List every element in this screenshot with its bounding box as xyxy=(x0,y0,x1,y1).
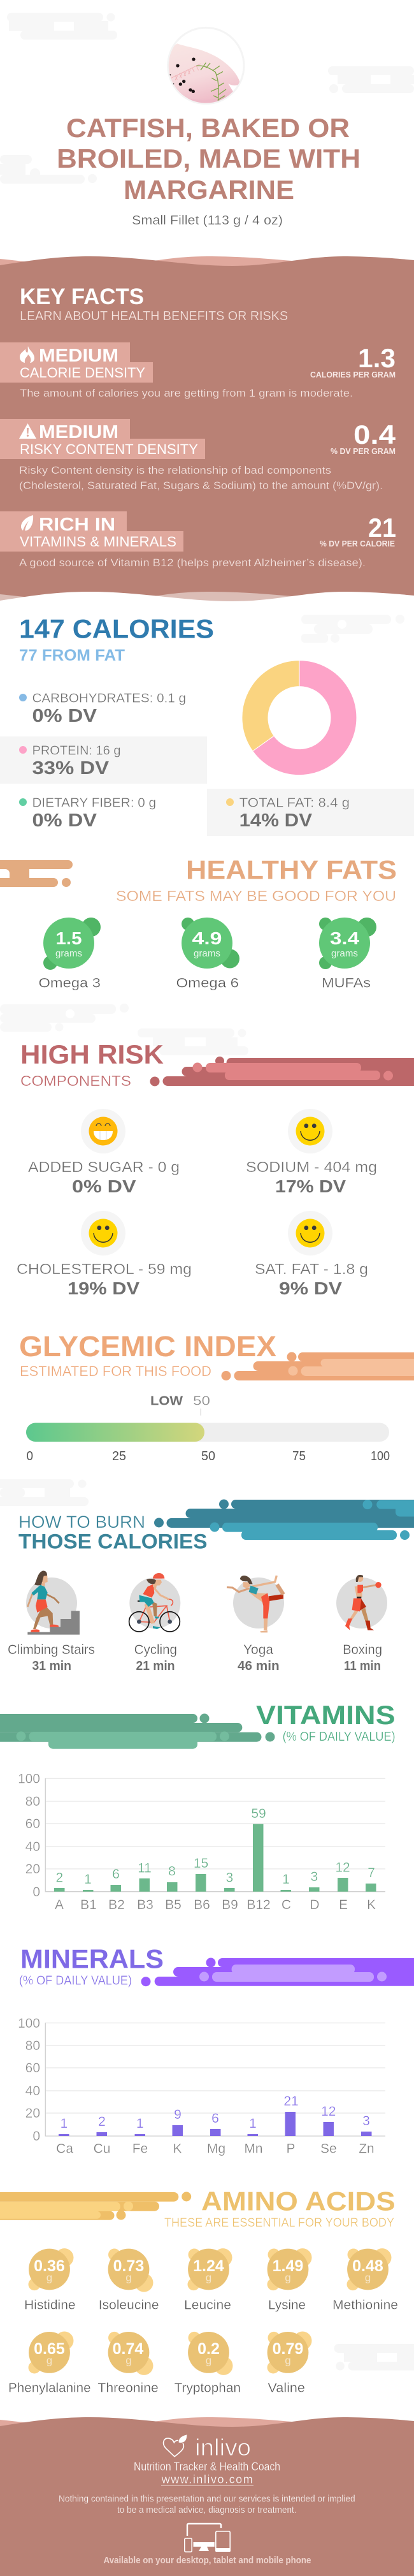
chart: macronutrient donut xyxy=(242,661,357,775)
activity: cycling: Cycling xyxy=(134,1643,177,1657)
item: added sugar: ADDED SUGAR - 0 g xyxy=(28,1159,180,1175)
heading: minerals: MINERALS xyxy=(20,1944,164,1974)
panel: key facts xyxy=(0,256,414,610)
chart: vitamins bar chart: B1 xyxy=(80,1898,97,1912)
gauge: glycemic index bar: 50 xyxy=(201,1449,215,1463)
amino: histidine: 0.36 xyxy=(34,2257,65,2275)
item: protein: PROTEIN: 16 g xyxy=(32,744,121,758)
item: protein: 33% DV xyxy=(32,758,110,779)
chart: minerals bar chart: 1 xyxy=(136,2116,144,2131)
icon: boxer xyxy=(336,1575,387,1630)
activity: climbing stairs: Climbing Stairs xyxy=(8,1643,95,1657)
chart: vitamins bar chart: A xyxy=(55,1898,64,1912)
chart: minerals bar chart: 12 xyxy=(321,2104,336,2119)
heading: glycemic index: GLYCEMIC INDEX xyxy=(19,1330,276,1363)
chart: minerals bar chart: 2 xyxy=(98,2114,106,2129)
chart: minerals bar chart: 100 xyxy=(18,2016,40,2031)
chart: vitamins bar chart: B5 xyxy=(165,1898,182,1912)
fat: omega 3: 1.5 xyxy=(56,928,82,948)
fat: omega 3: grams xyxy=(55,948,82,959)
activity: yoga: 46 min xyxy=(238,1659,280,1673)
chart: vitamins bar chart: K xyxy=(367,1898,376,1912)
gauge: glycemic index bar: 100 xyxy=(371,1449,390,1463)
activity: boxing: Boxing xyxy=(343,1643,382,1657)
activity: yoga: Yoga xyxy=(243,1643,273,1657)
subheading: minerals: (% OF DAILY VALUE) xyxy=(19,1974,132,1988)
fat: mufas: 3.4 xyxy=(330,928,359,948)
fact: rich in vitamins and minerals: VITAMINS & MINERALS xyxy=(20,534,176,550)
item: added sugar xyxy=(28,1109,180,1196)
amino: phenylalanine: 0.65 xyxy=(34,2340,65,2358)
chart: vitamins bar chart: C xyxy=(282,1898,291,1912)
fact: risky content density: Risky Content density is the relationship of bad components xyxy=(19,464,331,476)
fact: calorie density: 1.3 xyxy=(358,343,396,373)
chart: minerals bar chart: 3 xyxy=(362,2114,370,2128)
item: dietary fiber: 0% DV xyxy=(32,810,97,831)
amino: threonine: g xyxy=(125,2355,132,2367)
subheading: components: COMPONENTS xyxy=(20,1072,131,1089)
amino: lysine: 1.49 xyxy=(273,2257,303,2275)
panel: glycemic index xyxy=(19,1330,414,1463)
chart: vitamins bar chart: 59 xyxy=(251,1806,266,1821)
chart: vitamins bar chart: 2 xyxy=(55,1871,63,1885)
decoration: yellow bars xyxy=(0,2192,191,2220)
icon: woman in yoga pose xyxy=(227,1576,284,1632)
background cloud: burn xyxy=(0,1479,89,1506)
panel: calories xyxy=(0,613,414,836)
item: sodium: SODIUM - 404 mg xyxy=(246,1159,377,1175)
heading: 147 calories: 147 CALORIES xyxy=(19,613,214,644)
item: total fat: TOTAL FAT: 8.4 g xyxy=(239,796,350,810)
amino: tryptophan: Tryptophan xyxy=(175,2382,241,2396)
footer availability note: Available on your desktop, tablet and mobile phone xyxy=(103,2555,311,2566)
amino: threonine: 0.74 xyxy=(113,2340,143,2358)
amino: phenylalanine xyxy=(8,2331,91,2396)
icon: devices xyxy=(185,2524,231,2552)
chart: minerals bar chart: Mn xyxy=(244,2142,263,2156)
chart: minerals bar chart: Se xyxy=(320,2142,337,2156)
chart: minerals bar chart: Zn xyxy=(359,2142,375,2156)
amino: isoleucine xyxy=(99,2248,159,2313)
chart: vitamins bar chart: 3 xyxy=(311,1870,318,1884)
amino: leucine: 1.24 xyxy=(193,2257,224,2275)
chart: minerals bar chart: Mg xyxy=(207,2142,225,2156)
icon: fish fillet photo xyxy=(167,27,244,106)
fat: omega 6 xyxy=(176,918,239,991)
amino: tryptophan: 0.2 xyxy=(197,2340,220,2358)
chart: minerals bar chart xyxy=(18,2016,385,2156)
panel: how to burn those calories xyxy=(8,1500,414,1673)
icon: flame xyxy=(20,346,34,363)
item: carbohydrates: 0% DV xyxy=(32,706,97,726)
icon: woman climbing stairs xyxy=(26,1570,80,1635)
item: protein xyxy=(19,744,121,779)
chart: minerals bar chart: 40 xyxy=(25,2084,40,2098)
item: carbohydrates xyxy=(19,691,186,726)
fat: omega 6: Omega 6 xyxy=(176,976,239,991)
footer disclaimer: to be a medical advice, diagnosis or treatment. xyxy=(117,2505,297,2515)
row background: total fat xyxy=(207,789,414,836)
amino: methionine: 0.48 xyxy=(352,2257,383,2275)
item: carbohydrates: CARBOHYDRATES: 0.1 g xyxy=(32,691,186,705)
footer link: www.inlivo.com xyxy=(161,2473,253,2485)
amino: methionine: Methionine xyxy=(332,2299,398,2313)
activity: climbing stairs: 31 min xyxy=(32,1659,71,1673)
fact: calorie density: CALORIES PER GRAM xyxy=(310,370,396,379)
chart: minerals bar chart: K xyxy=(173,2142,182,2156)
icon: inlivo heart logo xyxy=(164,2434,187,2457)
amino: valine xyxy=(268,2331,312,2396)
item: saturated fat: 9% DV xyxy=(279,1278,342,1298)
fact: risky content density: RISKY CONTENT DENSITY xyxy=(20,441,198,457)
footer disclaimer xyxy=(59,2493,355,2515)
chart: vitamins bar chart: 20 xyxy=(25,1862,40,1877)
amino: lysine xyxy=(268,2248,312,2313)
amino: phenylalanine: Phenylalanine xyxy=(8,2382,91,2396)
item: cholesterol: CHOLESTEROL - 59 mg xyxy=(17,1261,192,1277)
icon: leaf xyxy=(21,515,33,531)
amino: valine: Valine xyxy=(268,2382,305,2396)
chart: vitamins bar chart: 1 xyxy=(84,1872,92,1887)
serving size subtitle: Small Fillet (113 g / 4 oz) xyxy=(132,214,283,228)
fat: omega 6: grams xyxy=(194,948,220,959)
title: BROILED, MADE WITH xyxy=(57,143,360,173)
heading: how to burn: HOW TO BURN xyxy=(18,1512,145,1532)
activity: yoga xyxy=(227,1576,284,1673)
panel: amino acids xyxy=(0,2186,398,2396)
decoration: green bars xyxy=(0,1714,275,1749)
heading: those calories: THOSE CALORIES xyxy=(18,1530,208,1553)
fat: mufas: MUFAs xyxy=(322,976,371,991)
item: sodium: 17% DV xyxy=(275,1176,346,1196)
item: sodium xyxy=(246,1109,377,1196)
chart: vitamins bar chart: D xyxy=(310,1898,320,1912)
amino: histidine xyxy=(24,2248,76,2313)
chart: vitamins bar chart: 6 xyxy=(112,1867,120,1882)
amino: lysine: g xyxy=(285,2271,291,2284)
subheading: vitamins: (% OF DAILY VALUE) xyxy=(283,1730,396,1744)
amino: isoleucine: 0.73 xyxy=(113,2257,144,2275)
amino: lysine: Lysine xyxy=(268,2299,306,2313)
footer xyxy=(0,2417,414,2576)
icon: woman cycling xyxy=(129,1573,180,1632)
amino: tryptophan: g xyxy=(206,2355,211,2367)
gauge: glycemic index bar: LOW xyxy=(150,1394,183,1409)
panel: vitamins xyxy=(0,1700,396,1912)
heading: healthy fats: HEALTHY FATS xyxy=(186,854,397,885)
footer disclaimer: Nothing contained in this presentation and our services is intended or implied xyxy=(59,2493,355,2505)
gauge: glycemic index bar: 75 xyxy=(292,1449,306,1463)
chart: vitamins bar chart: B9 xyxy=(222,1898,238,1912)
background clouds: header xyxy=(0,13,414,184)
title: MARGARINE xyxy=(124,175,294,205)
amino: histidine: g xyxy=(46,2271,52,2284)
fact: risky content density: 0.4 xyxy=(353,420,396,450)
title xyxy=(57,113,360,205)
chart: minerals bar chart: 0 xyxy=(32,2129,40,2144)
chart: vitamins bar chart: B3 xyxy=(137,1898,153,1912)
chart: vitamins bar chart: 7 xyxy=(368,1866,375,1880)
icon: smiling face xyxy=(89,1219,117,1247)
fat: omega 6: 4.9 xyxy=(192,928,222,948)
chart: vitamins bar chart xyxy=(18,1771,385,1912)
subheading: key facts: LEARN ABOUT HEALTH BENEFITS OR RISKS xyxy=(20,309,288,323)
item: cholesterol: 19% DV xyxy=(68,1278,139,1298)
activity: cycling xyxy=(129,1573,180,1673)
chart: minerals bar chart: 9 xyxy=(174,2107,182,2122)
chart: vitamins bar chart: 40 xyxy=(25,1840,40,1854)
chart: vitamins bar chart: B6 xyxy=(194,1898,210,1912)
item: added sugar: 0% DV xyxy=(72,1176,136,1196)
panel: minerals xyxy=(18,1944,414,2156)
amino: tryptophan xyxy=(175,2332,241,2396)
amino: leucine xyxy=(184,2248,232,2313)
chart: vitamins bar chart: 1 xyxy=(282,1872,290,1887)
gauge: glycemic index bar: 0 xyxy=(27,1449,33,1463)
fact: rich in vitamins and minerals: % DV PER CALORIE xyxy=(320,539,395,548)
item: cholesterol xyxy=(17,1211,192,1298)
chart: minerals bar chart: 6 xyxy=(211,2111,219,2126)
chart: minerals bar chart: P xyxy=(286,2142,296,2156)
fat: mufas xyxy=(319,918,376,991)
decoration: tan bars xyxy=(0,860,73,887)
chart: vitamins bar chart: 100 xyxy=(18,1771,40,1787)
fact: calorie density xyxy=(0,342,396,399)
chart: minerals bar chart: 80 xyxy=(25,2038,40,2053)
decoration: teal bars xyxy=(154,1500,414,1540)
subheading: amino acids: THESE ARE ESSENTIAL FOR YOUR BODY xyxy=(164,2216,394,2230)
amino: isoleucine: g xyxy=(125,2271,132,2284)
fact: rich in vitamins and minerals xyxy=(0,511,396,569)
fact: calorie density: MEDIUM xyxy=(39,346,118,366)
icon: grinning face xyxy=(89,1117,117,1145)
chart: vitamins bar chart: 3 xyxy=(225,1871,233,1885)
decoration: purple bars xyxy=(141,1958,414,1986)
fact: risky content density: MEDIUM xyxy=(39,422,118,443)
item: dietary fiber: DIETARY FIBER: 0 g xyxy=(32,796,156,810)
item: total fat: 14% DV xyxy=(239,810,313,831)
chart: vitamins bar chart: B2 xyxy=(108,1898,125,1912)
title: CATFISH, BAKED OR xyxy=(66,113,350,143)
fact: calorie density: The amount of calories you are getting from 1 gram is moderate. xyxy=(20,387,353,399)
item: dietary fiber xyxy=(19,796,156,831)
gauge: glycemic index bar: 25 xyxy=(112,1449,126,1463)
fact: rich in vitamins and minerals: 21 xyxy=(368,513,396,543)
fat: mufas: grams xyxy=(331,948,358,959)
amino: threonine xyxy=(97,2332,159,2396)
fact: calorie density: CALORIE DENSITY xyxy=(20,365,145,381)
fact: risky content density xyxy=(0,419,396,492)
chart: minerals bar chart: 21 xyxy=(283,2094,299,2109)
chart: minerals bar chart: Fe xyxy=(132,2142,148,2156)
gauge: glycemic index bar xyxy=(26,1394,390,1463)
chart: vitamins bar chart: E xyxy=(339,1898,348,1912)
amino: leucine: g xyxy=(206,2271,211,2284)
background cloud: calories xyxy=(301,615,404,643)
subheading: glycemic index: ESTIMATED FOR THIS FOOD xyxy=(20,1363,211,1379)
item: total fat xyxy=(226,796,350,831)
item: saturated fat: SAT. FAT - 1.8 g xyxy=(255,1261,368,1277)
chart: vitamins bar chart: 15 xyxy=(194,1856,208,1871)
chart: vitamins bar chart: 0 xyxy=(32,1885,40,1899)
logo wordmark: inlivo xyxy=(195,2434,251,2461)
fat: omega 3: Omega 3 xyxy=(38,976,101,991)
chart: minerals bar chart: Cu xyxy=(94,2142,110,2156)
chart: minerals bar chart: 1 xyxy=(60,2116,68,2131)
amino: methionine: g xyxy=(365,2271,371,2284)
icon: smiling face xyxy=(296,1219,325,1247)
activity: cycling: 21 min xyxy=(136,1659,175,1673)
amino: phenylalanine: g xyxy=(46,2355,52,2367)
chart: minerals bar chart: 60 xyxy=(25,2061,40,2075)
subheading: from fat: 77 FROM FAT xyxy=(19,647,125,664)
chart: minerals bar chart: 20 xyxy=(25,2106,40,2121)
item: saturated fat xyxy=(255,1211,368,1298)
chart: vitamins bar chart: 80 xyxy=(25,1794,40,1809)
background clouds: high risk xyxy=(0,1004,248,1055)
chart: vitamins bar chart: B12 xyxy=(246,1898,271,1912)
icon: warning triangle xyxy=(19,423,36,439)
amino: methionine xyxy=(332,2248,398,2313)
activity: boxing xyxy=(336,1575,387,1673)
chart: vitamins bar chart: 11 xyxy=(138,1861,152,1876)
chart: vitamins bar chart: 60 xyxy=(25,1817,40,1831)
icon: smiling face xyxy=(296,1117,325,1145)
chart: vitamins bar chart: 8 xyxy=(168,1864,176,1879)
amino: leucine: Leucine xyxy=(184,2299,231,2313)
fact: rich in vitamins and minerals: RICH IN xyxy=(39,515,115,535)
background cloud: amino acids xyxy=(334,2344,414,2371)
footer tagline: Nutrition Tracker & Health Coach xyxy=(134,2461,280,2473)
decoration: orange bars xyxy=(222,1352,414,1380)
activity: climbing stairs xyxy=(8,1570,95,1673)
chart: minerals bar chart: Ca xyxy=(56,2142,73,2156)
row background: protein xyxy=(0,736,207,784)
panel: high risk components xyxy=(17,1039,414,1298)
fact: risky content density: (Cholesterol, Saturated Fat, Sugars & Sodium) to the amount (%DV/gr). xyxy=(19,479,383,492)
fact: risky content density: % DV PER GRAM xyxy=(331,446,396,456)
activity: boxing: 11 min xyxy=(344,1659,381,1673)
amino: threonine: Threonine xyxy=(97,2382,159,2396)
amino: valine: g xyxy=(285,2355,291,2367)
heading: key facts: KEY FACTS xyxy=(20,284,144,309)
panel: healthy fats xyxy=(0,854,397,991)
amino: valine: 0.79 xyxy=(273,2340,303,2358)
heading: high risk: HIGH RISK xyxy=(20,1039,164,1069)
amino: isoleucine: Isoleucine xyxy=(99,2299,159,2313)
amino: histidine: Histidine xyxy=(24,2299,76,2313)
fact: rich in vitamins and minerals: A good source of Vitamin B12 (helps prevent Alzheimer’s disease). xyxy=(19,557,366,569)
decoration: red bars xyxy=(150,1057,414,1087)
gauge: glycemic index bar: 50 xyxy=(193,1394,210,1409)
chart: vitamins bar chart: 12 xyxy=(335,1861,350,1875)
heading: vitamins: VITAMINS xyxy=(256,1700,396,1730)
chart: minerals bar chart: 1 xyxy=(249,2116,257,2131)
heading: amino acids: AMINO ACIDS xyxy=(201,2186,396,2216)
fat: omega 3 xyxy=(38,918,101,991)
subheading: healthy fats: SOME FATS MAY BE GOOD FOR YOU xyxy=(116,888,396,904)
